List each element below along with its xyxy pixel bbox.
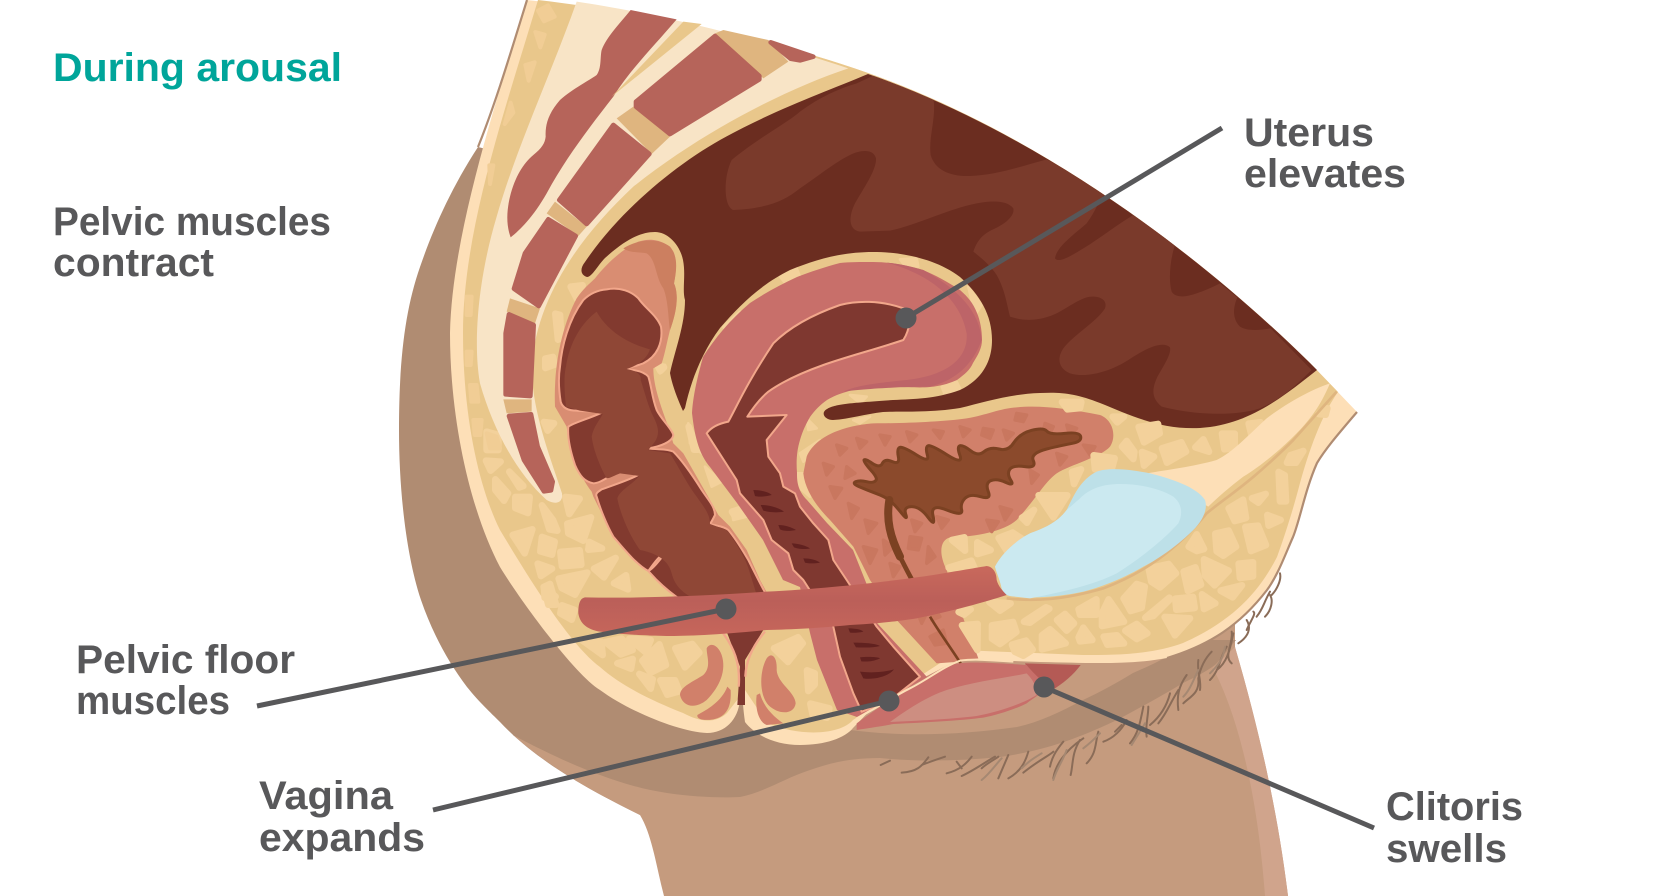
label: vagina expands [259,774,425,860]
bladder rim [995,469,1206,597]
fat cell pattern bottom [544,584,829,718]
fat cell pattern back [467,5,555,448]
label: clitoris swells [1386,785,1523,871]
label: uterus elevates: Uterus [1244,111,1374,155]
left lobe band [697,687,731,720]
title: During arousal [53,46,342,90]
vulva [857,660,1081,730]
rectum interior [559,289,770,602]
bladder wall region [803,407,1113,663]
labia inner [890,673,1037,722]
callout line: vagina [433,690,900,810]
callout line: clitoris [1034,676,1374,828]
uterus wall shading [843,263,982,392]
label: uterus elevates [1244,111,1406,196]
label: pelvic floor muscles: Pelvic floor [76,638,295,682]
fat cell pattern front [949,402,1327,656]
skin edge line [478,0,1357,658]
callout line: uterus [896,128,1222,328]
vulva rim line [857,660,1013,718]
fat cell pattern left [486,285,741,598]
label: pelvic floor muscles [76,638,295,723]
bowel loops [726,73,1312,414]
right lobe peach [761,655,796,712]
vagina and uterus wall [692,262,982,717]
rectum wall [555,240,770,598]
label: clitoris swells: swells [1386,827,1507,871]
body silhouette [399,147,1288,896]
dark tissue between lobes [727,630,763,705]
labia outer [857,662,1047,730]
bladder fat edge [1007,392,1337,600]
rectum interior light [564,312,758,600]
label: uterus elevates: elevates [1244,152,1406,196]
pelvic cross-section skin [450,0,1357,745]
sacral vertebrae [506,36,813,491]
vertebrae and spine [503,10,813,491]
label: clitoris swells: Clitoris [1386,785,1523,829]
fat layer [463,0,1338,732]
pelvic lobes [680,630,796,725]
uterine lumen [854,429,1081,522]
spinal cord [507,10,677,237]
cream wedge near pubic bone [1147,383,1330,507]
label: vagina expands: Vagina [259,774,394,818]
pubic hair [881,573,1280,780]
fat lobes around organs [655,258,982,520]
cervical canal [888,500,900,557]
clitoris [1025,663,1081,693]
abdominal cavity [581,74,1317,428]
lobe edge lines [723,632,765,687]
label: pelvic muscles contract: contract [53,241,214,285]
tissue texture [823,413,1095,645]
callout line: pelvic floor [257,598,736,706]
rectum upper wall shading [623,240,677,330]
pelvic floor muscle [578,566,1007,636]
vaginal rugae [753,490,894,679]
uterine and vaginal cavity [707,302,920,712]
label: vagina expands: expands [259,816,425,860]
fat sliver [612,22,702,97]
label: pelvic floor muscles: muscles [76,679,230,723]
bladder [995,392,1337,600]
rectum [555,240,770,602]
bladder fluid [995,484,1181,598]
label: pelvic muscles contract [53,200,331,285]
intervertebral discs [503,30,788,413]
right lobe band [756,693,783,725]
left lobe peach [680,645,723,706]
label: pelvic muscles contract: Pelvic muscles [53,200,331,244]
pale spinal tissue [477,2,848,503]
